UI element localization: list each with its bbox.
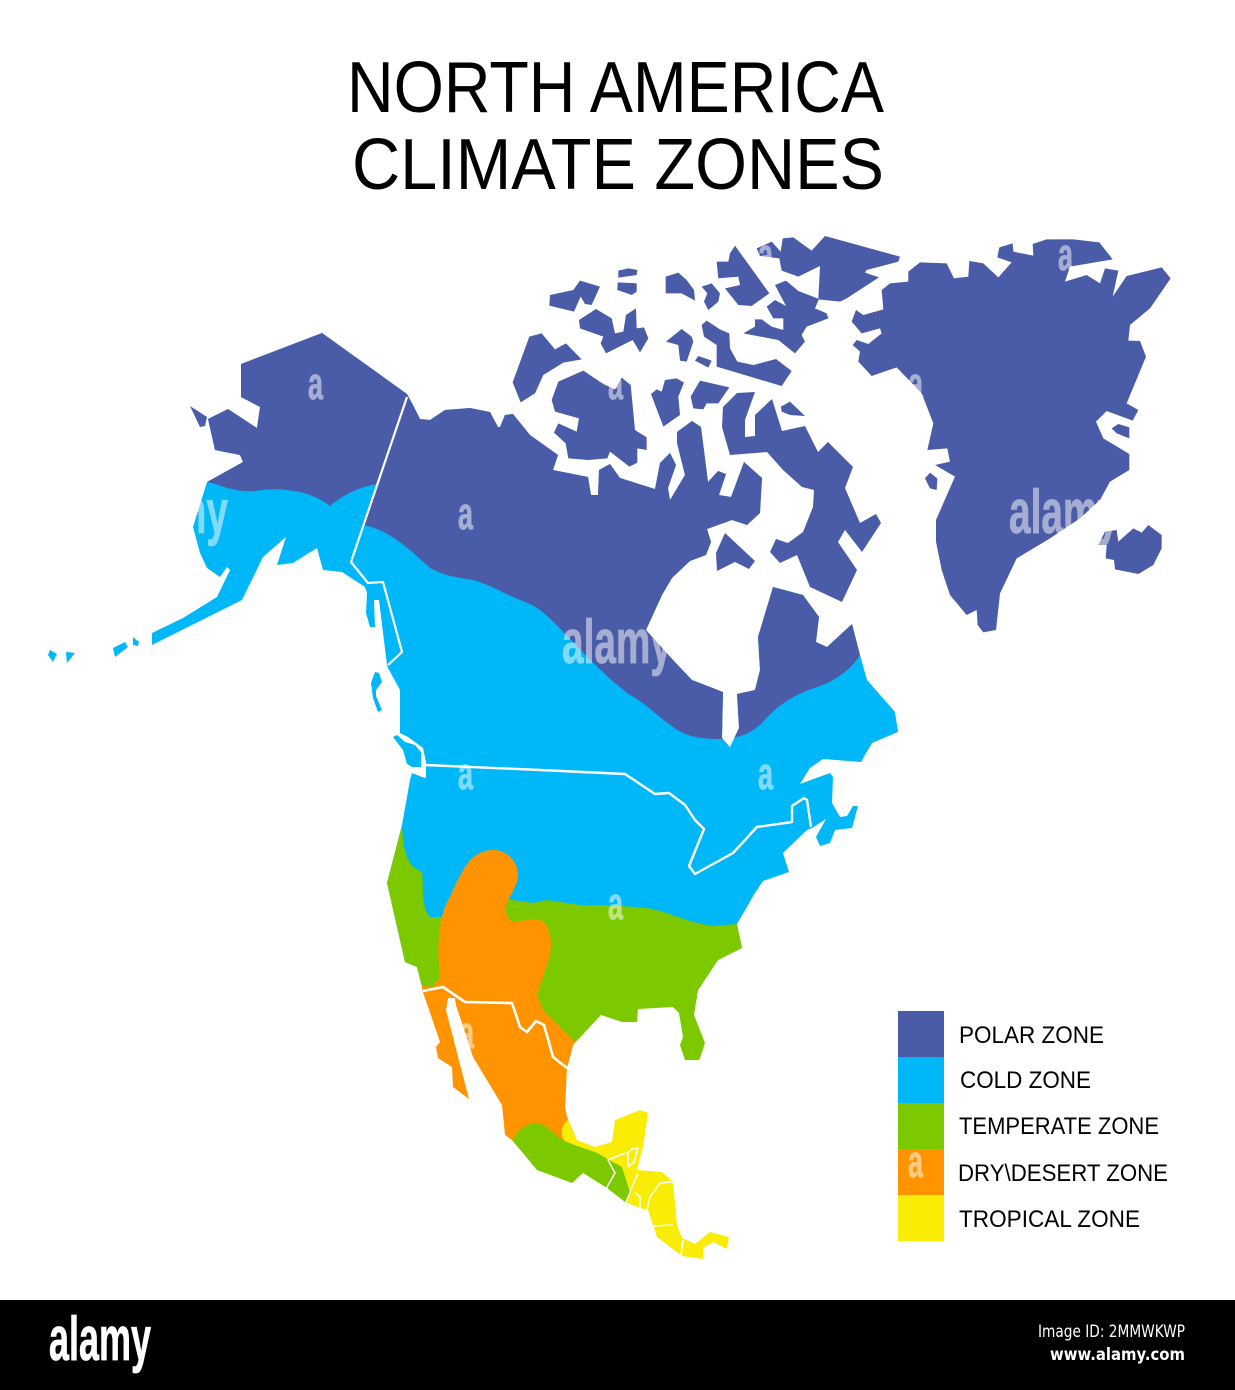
legend: cold [898, 1057, 1091, 1103]
tropical zone [562, 1110, 729, 1259]
watermarks: a [459, 1007, 475, 1058]
watermarks: a [758, 748, 774, 799]
title: NORTH AMERICA [347, 48, 884, 128]
Iceland [1098, 525, 1162, 574]
Greenland [852, 239, 1171, 632]
watermarks: a [758, 229, 774, 280]
temperate zone: southern Mexico [512, 1123, 630, 1203]
mainland zones [152, 333, 898, 1259]
legend: polar: POLAR ZONE [959, 1022, 1104, 1049]
Pacific coast islands [371, 672, 421, 767]
watermarks [118, 229, 1119, 1187]
watermarks: a [908, 1136, 924, 1187]
dry / desert zone [415, 850, 580, 1150]
Baffin Island [722, 392, 881, 602]
legend: temperate: TEMPERATE ZONE [959, 1113, 1159, 1140]
legend [898, 1011, 1168, 1241]
legend: tropical [898, 1195, 1140, 1241]
title: CLIMATE ZONES [352, 125, 884, 205]
polar zone [207, 333, 860, 739]
watermarks: a [608, 878, 624, 929]
legend: tropical: TROPICAL ZONE [959, 1206, 1140, 1233]
title [347, 48, 884, 205]
watermarks: a [908, 358, 924, 409]
watermarks: alamy [118, 478, 228, 547]
Seward island [190, 406, 207, 427]
legend: dry/desert: DRY\DESERT ZONE [958, 1160, 1168, 1187]
footer logo: alamy [49, 1305, 151, 1374]
watermarks: a [1058, 229, 1074, 280]
watermarks: alamy [1009, 478, 1119, 547]
national borders [351, 397, 811, 1256]
watermarks: a [458, 488, 474, 539]
footer bar [0, 1300, 1235, 1390]
legend: cold: COLD ZONE [960, 1067, 1091, 1094]
watermarks: a [308, 358, 324, 409]
watermarks: a [608, 358, 624, 409]
map: North America climate zones [48, 236, 1171, 1280]
Canadian Arctic islands [513, 236, 900, 467]
legend: temperate [898, 1103, 1159, 1149]
image id: Image ID: 2MMWKWP [1038, 1322, 1185, 1342]
Aleutian islands [48, 637, 139, 663]
website: www.alamy.com [1050, 1345, 1185, 1365]
temperate zone [380, 825, 760, 1060]
legend: polar [898, 1011, 1104, 1057]
Southampton Island [716, 533, 755, 571]
watermarks: alamy [562, 608, 672, 677]
cold zone [152, 333, 898, 1000]
legend: dry/desert [898, 1149, 1168, 1195]
watermarks: a [458, 748, 474, 799]
